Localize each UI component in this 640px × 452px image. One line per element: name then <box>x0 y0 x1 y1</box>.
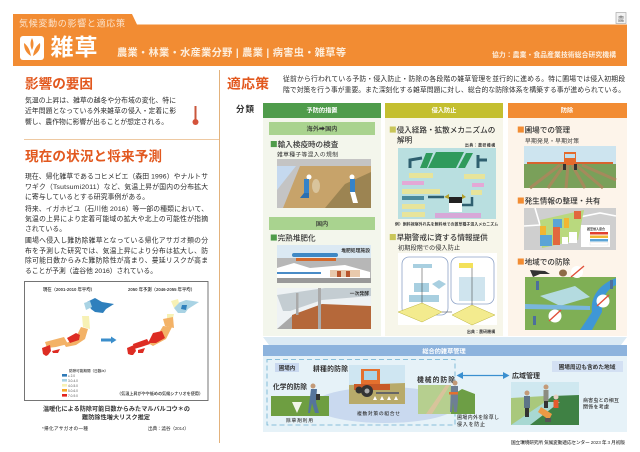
note: weed both inside and outside: 侵入を防止 <box>457 421 485 428</box>
classification label: 分類 <box>236 104 254 114</box>
panel: integrated weed management: 総合的雑草管理 <box>422 348 466 356</box>
status text: 布を予測した研究では、気温上昇により分布は拡大し、防 <box>25 246 208 255</box>
page badge <box>616 12 626 24</box>
item: information sharing: ■発生情報の整理・共有 <box>517 196 601 206</box>
scenario note: （気温上昇がやや低めの気候シナリオを使用） <box>117 390 203 396</box>
icon: cow <box>444 194 466 212</box>
illustration: tractor <box>349 365 405 404</box>
item: field management <box>517 124 579 145</box>
legend: 7.0-9.0 <box>68 394 78 398</box>
item: composting: ■完熟堆肥化 <box>270 232 316 244</box>
label: surrounding area: 圃場周辺も含めた地域 <box>559 363 616 371</box>
note: pest interaction <box>583 397 619 410</box>
map caption: 温暖化による防除可能日数からみたマルバルコウ＊の <box>43 405 190 413</box>
illustration: field map <box>524 208 616 250</box>
subheader: overseas to domestic <box>269 122 375 135</box>
label: mechanical control: 機械的防除 <box>417 375 455 384</box>
legend: ≤ 2.0 <box>68 374 75 378</box>
flowchart: early warning <box>398 253 497 334</box>
illustration: compost facility <box>277 245 371 283</box>
panel: prevention: 予防的措置 <box>307 106 337 114</box>
subheader: domestic <box>269 217 375 230</box>
diagram caption: 例）飼料視察外れ先を飼料地での雑草種子混入メカニズム <box>395 222 498 226</box>
illustration: sprayer tractor <box>524 146 616 188</box>
impact text <box>25 96 176 126</box>
cooperation credit: 協力：農業・食品産業技術総合研究機構 <box>492 50 616 59</box>
adaptation intro <box>283 74 625 94</box>
label: cultural control: 耕種的防除 <box>313 364 348 373</box>
legend: 5.0-6.0 <box>68 389 78 393</box>
map: 2050 <box>127 299 199 355</box>
map: present <box>42 298 114 356</box>
map footnotes <box>42 425 189 432</box>
panel: integrated weed management: 複数対策の組合せ <box>357 410 400 417</box>
subheader: domestic: 国内 <box>316 220 328 228</box>
item: invasion routes: ■侵入経路・拡散メカニズムの <box>389 124 495 136</box>
item: early warning: 初期段階での侵入防止 <box>398 244 460 252</box>
column divider <box>218 70 220 443</box>
main title: 雑草 <box>50 34 98 60</box>
panel: prevention <box>263 103 381 336</box>
impact text: 近年問題となっている外来雑草の侵入・定着に影 <box>25 106 176 115</box>
panel: integrated weed management: 除草剤利用 <box>286 417 313 424</box>
impact text: 響し、農作物に影響が出ることが想定される。 <box>25 117 168 126</box>
panel: control <box>508 103 627 336</box>
heading: impact factors: 影響の要因 <box>25 76 93 92</box>
illustration: regional weed control <box>525 266 616 330</box>
icon: weed <box>20 36 44 60</box>
panel: integrated weed management <box>263 345 627 432</box>
map caption: 難防除性増大リスク推定 <box>82 414 150 422</box>
panel: prevention: 雑草種子等混入の規制 <box>277 150 338 158</box>
page badge: 農 <box>618 14 625 23</box>
panel: current status and projections <box>24 148 208 432</box>
status text: 現在、帰化雑草であるコヒメビエ（森田 1996）やナルトサ <box>25 172 208 180</box>
item: invasion routes: 出典：農研機構 <box>465 142 495 148</box>
adaptation intro: 従前から行われている予防・侵入防止・防除の各段階の雑草管理を並行的に進める。特に圃場では侵入初期段 <box>283 74 625 83</box>
item: early warning <box>389 232 488 252</box>
illustration: field map: 雑草侵入度合 <box>587 226 605 231</box>
footer credit: 国立環境研究所 気候変動適応センター 2023 年 3 月初版 <box>511 439 625 446</box>
map footnotes: *帰化アサガオの一種 <box>42 425 88 432</box>
header tab label: 気候変動の影響と適応策 <box>19 18 125 28</box>
on-field dashed box <box>267 360 455 425</box>
panel: adaptation measures <box>227 74 625 114</box>
item: field management: ■圃場での管理 <box>517 124 571 136</box>
status text: 圃場へ侵入し難防除雑草となっている帰化アサガオ類の分 <box>25 236 208 244</box>
legend <box>62 368 108 398</box>
item: import inspection: ■輸入検疫時の検査 <box>270 139 339 150</box>
chart: Japan risk maps <box>24 282 208 400</box>
label: in-field: 圃場内 <box>279 364 296 372</box>
panel: control: 防除 <box>561 106 574 114</box>
status text: 将来、イガホビユ（石川他 2016）等一部の種類において、 <box>25 204 208 213</box>
status text: 除可能日数からみた難防除性が高まり、蔓延リスクが高ま <box>25 256 208 264</box>
arrow: into integrated management <box>263 337 627 345</box>
illustration: primary fermentation: 一次発酵 <box>350 290 369 297</box>
heading: current status: 現在の状況と将来予測 <box>25 148 162 164</box>
flowchart: early warning: 出典：農研機構 <box>467 329 495 334</box>
header band <box>13 14 627 66</box>
map footnotes: 出典：澁谷（2014） <box>148 425 189 432</box>
illustration: compost facility: 堆肥処理施設 <box>341 247 370 254</box>
note: weed both inside and outside <box>457 414 499 428</box>
status text: 気温の上昇により定着可能域の拡大や北上の可能性が指摘 <box>25 214 208 223</box>
item: invasion routes <box>389 124 495 148</box>
status text <box>25 172 208 275</box>
illustration: regional farmers <box>511 382 579 425</box>
item: regional control: ■地域での防除 <box>517 256 571 268</box>
illustration: primary fermentation <box>277 288 371 329</box>
panel: invasion prevention <box>385 103 503 336</box>
panel: impact factors <box>25 76 198 126</box>
chart: Japan risk maps: 2050 年予測（2046-2055 年平均） <box>128 286 195 293</box>
status text: ることが予測（澁谷他 2016）されている。 <box>25 266 157 275</box>
label: in-field <box>275 363 299 372</box>
map caption <box>43 405 190 422</box>
legend: 4.0-5.0 <box>68 384 78 388</box>
diagram: invasion mechanism <box>398 148 496 219</box>
illustration: mowing <box>418 380 475 414</box>
status text: ワギク（Tsutsumi2011）など、気温上昇が国内の分布拡大 <box>25 182 208 191</box>
label: wide-area management: 広域管理 <box>512 371 540 380</box>
impact text: 気温の上昇は、雑草の越冬や分布域の変化、特に <box>25 96 176 104</box>
illustration: herbicide <box>271 384 329 416</box>
illustration: ship hold inspection <box>277 159 371 208</box>
status text: に寄与しているとする研究事例がある。 <box>25 192 149 201</box>
chart: Japan risk maps: 現在（2001-2010 年平均） <box>43 286 95 293</box>
legend: 防除可能期間（日数/a） <box>69 368 108 373</box>
icon: thermometer <box>192 106 198 125</box>
label: surrounding area <box>552 361 623 372</box>
note: pest interaction: 病害虫との相互 <box>583 397 619 404</box>
sector subtitle: 農業・林業・水産業分野 | 農業 | 病害虫・雑草等 <box>117 46 346 59</box>
item: invasion routes: 解明 <box>397 134 413 144</box>
note: pest interaction: 関係を考慮 <box>583 404 609 410</box>
status text: されている。 <box>25 225 66 233</box>
panel: invasion prevention: 侵入防止 <box>432 106 456 114</box>
arrow: field to wide area <box>456 372 510 379</box>
arrow: present to future <box>101 336 116 344</box>
legend: 3.0-4.0 <box>68 379 78 383</box>
note: weed both inside and outside: 圃場内外を除草し <box>457 414 499 421</box>
item: early warning: ■早期警戒に資する情報提供 <box>389 232 488 243</box>
adaptation intro: 階で対策を行う事が重要。また深刻化する雑草問題に対し、総合的な防除体系を構築する事が進められている。 <box>283 85 625 94</box>
heading: adaptation: 適応策 <box>227 76 269 92</box>
label: chemical control: 化学的防除 <box>273 382 307 391</box>
item: field management: 早期発見・早期対策 <box>525 137 579 145</box>
subheader: overseas to domestic: 海外➡国内 <box>307 125 337 133</box>
